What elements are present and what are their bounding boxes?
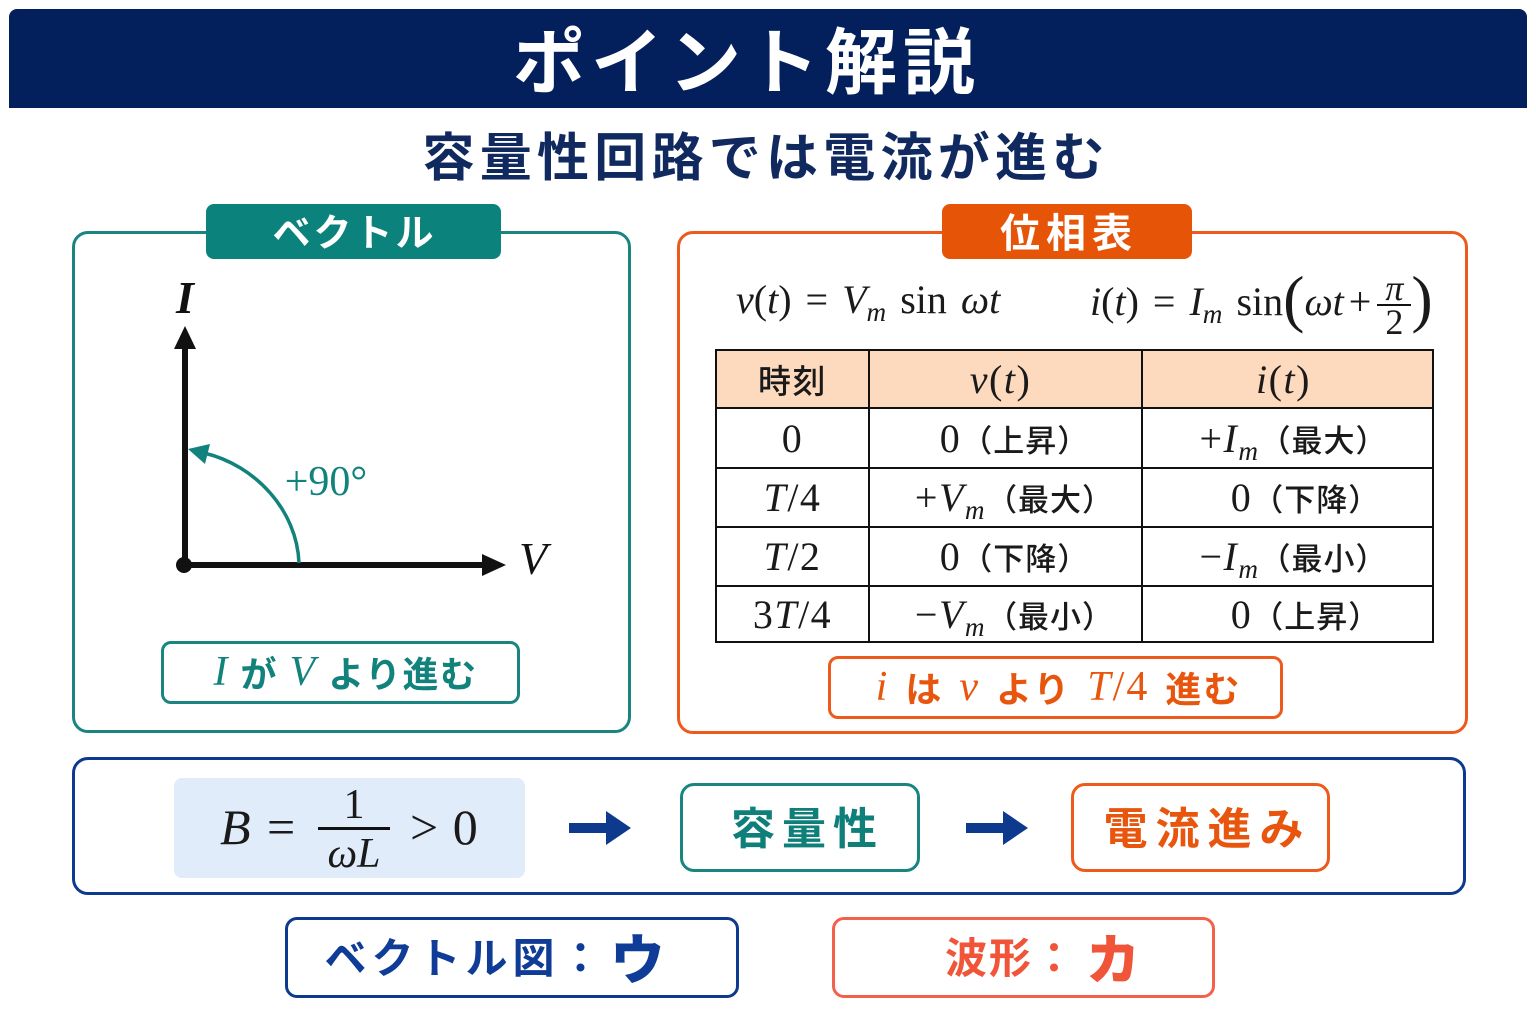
callout: I leads V: I: [214, 648, 229, 694]
phase table: +Vm（最大）: [915, 475, 1114, 525]
phase table: +Im（最大）: [1199, 416, 1388, 466]
title banner: ポイント解説: [513, 24, 981, 104]
arrow 2: [966, 811, 1028, 845]
heading: vector: ベクトル: [272, 213, 436, 255]
formula box: [174, 778, 525, 878]
box: capacitive: [680, 783, 920, 872]
fraction: [318, 782, 390, 877]
box: current leads: [1071, 783, 1330, 872]
greater than zero: > 0: [410, 799, 478, 855]
label +90: +90°: [285, 459, 367, 505]
formula: current: 2: [1385, 302, 1403, 342]
title banner: [9, 9, 1527, 108]
callout: i leads v: [828, 656, 1283, 719]
phase table: 0: [782, 416, 803, 460]
subtitle: 容量性回路では電流が進む: [422, 130, 1110, 188]
arrow 1: [569, 811, 631, 845]
heading: phase table: [942, 204, 1192, 259]
callout: i leads v: v: [959, 664, 980, 710]
panel: vector diagram: [72, 231, 631, 733]
phase table: 0（下降）: [940, 534, 1089, 579]
angle arc: [188, 444, 299, 563]
box: current leads: 電流進み: [1104, 805, 1312, 854]
answer: waveform: カ: [1086, 930, 1142, 990]
answer: vector diagram: ウ: [610, 930, 670, 990]
callout: i leads v: i: [876, 664, 889, 710]
phase table: i(t): [1256, 356, 1311, 402]
answer: waveform: [832, 917, 1215, 998]
fraction: 1: [344, 782, 364, 828]
fraction: ωL: [327, 831, 380, 877]
callout: I leads V: V: [290, 648, 317, 694]
phase table: 0（上昇）: [940, 416, 1089, 460]
formula: current: i(t) = Im sin(ωt+ ): [1090, 263, 1433, 334]
phase table: [715, 349, 1434, 643]
callout: i leads v: T/4: [1087, 664, 1149, 710]
phase table: T/2: [764, 534, 821, 579]
formula: current: π: [1385, 268, 1403, 308]
phase table: v(t): [970, 356, 1031, 402]
panel: phase table: [677, 231, 1468, 734]
answer: waveform: 波形：: [945, 934, 1077, 982]
callout: I leads V: [161, 641, 520, 704]
phase table: 3T/4: [753, 592, 832, 636]
phase table: 0（下降）: [1231, 475, 1380, 520]
B equals: B =: [220, 799, 295, 855]
box: capacitive: 容量性: [731, 805, 884, 854]
chart: phasor diagram: [174, 275, 552, 584]
phase table: −Im（最小）: [1199, 534, 1388, 584]
answer: vector diagram: ベクトル図：: [324, 934, 606, 982]
I axis: [174, 326, 196, 565]
label V: V: [519, 533, 552, 584]
V axis: [176, 554, 506, 576]
phase table: −Vm（最小）: [915, 592, 1114, 642]
phase table: 時刻: [758, 355, 827, 403]
formula: voltage: v(t) = Vm sin ωt: [736, 277, 1000, 327]
heading: phase table: 位相表: [1000, 212, 1138, 256]
phase table: 0（上昇）: [1231, 592, 1380, 636]
callout: I leads V: が より進む: [241, 654, 477, 694]
heading: vector: [206, 204, 501, 259]
phase table: T/4: [764, 475, 821, 520]
callout: i leads v: は より 進む: [905, 668, 1241, 710]
answer: vector diagram: [285, 917, 739, 998]
panel: summary flow: [72, 757, 1466, 895]
